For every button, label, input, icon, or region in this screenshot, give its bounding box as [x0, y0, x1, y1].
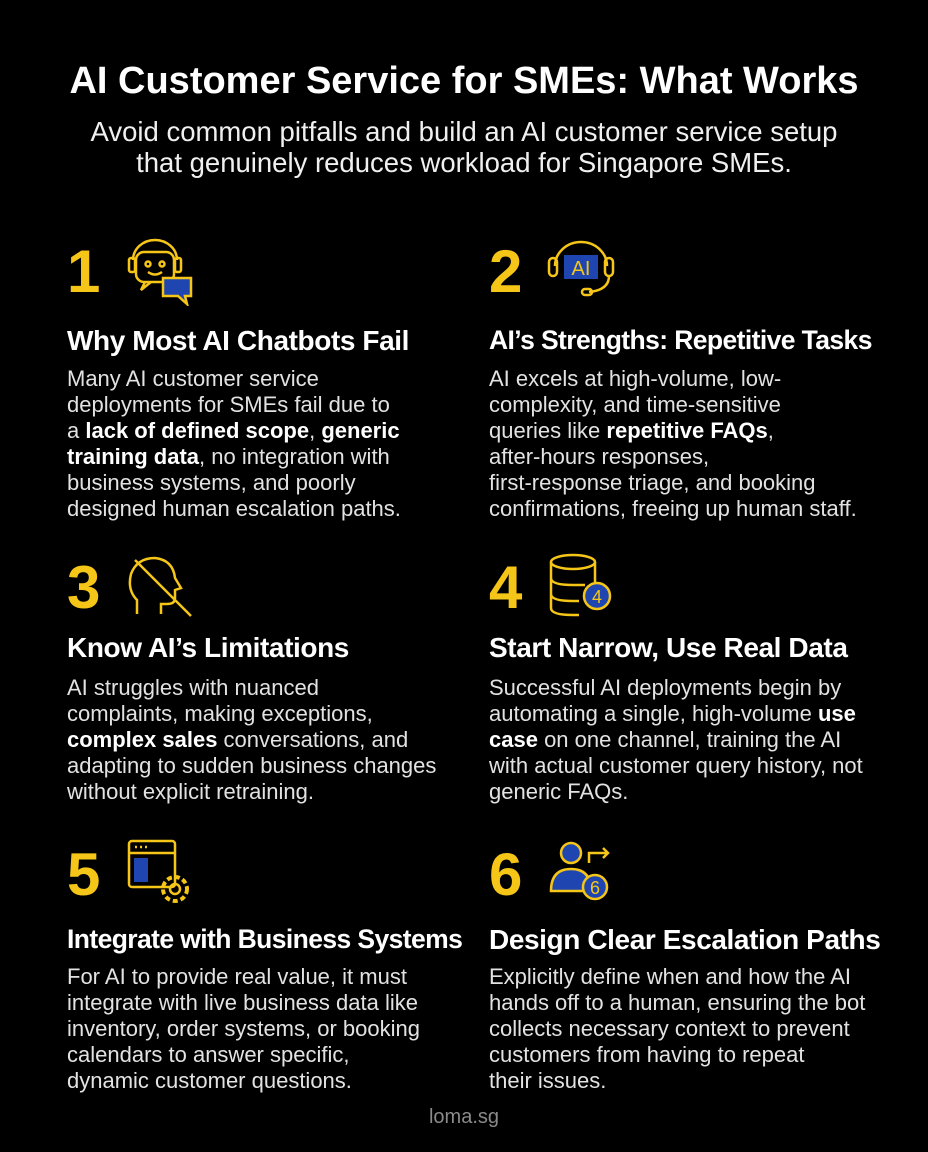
body text: confirmations, freeing up human staff. — [489, 496, 857, 521]
body text: Many AI customer service — [67, 366, 319, 391]
body text: complexity, and time-sensitive — [489, 392, 781, 417]
body text — [67, 964, 420, 1093]
body text: queries like repetitive FAQs, — [489, 418, 774, 443]
subtitle: Avoid common pitfalls and build an AI customer service setup — [91, 116, 837, 147]
body text — [67, 366, 401, 521]
body text: a lack of defined scope, generic — [67, 418, 400, 443]
panel: 3 limitations — [67, 554, 436, 804]
icon: chatbot — [128, 238, 192, 306]
number 6: 6 — [489, 841, 522, 908]
panel: 6 escalation — [489, 841, 880, 1093]
heading: Design Clear Escalation Paths — [489, 924, 880, 955]
icon: head crossed out — [128, 556, 192, 617]
body text: inventory, order systems, or booking — [67, 1016, 420, 1041]
body text: collects necessary context to prevent — [489, 1016, 850, 1041]
body text — [67, 675, 436, 804]
icon: database — [550, 554, 612, 616]
panel: 2 strengths — [489, 238, 872, 521]
body text: generic FAQs. — [489, 779, 628, 804]
footer: loma.sg — [429, 1106, 499, 1128]
body text: designed human escalation paths. — [67, 496, 401, 521]
body text: integrate with live business data like — [67, 990, 418, 1015]
icon: window with gear — [128, 840, 189, 903]
number 3: 3 — [67, 554, 100, 621]
heading: Integrate with Business Systems — [67, 924, 462, 954]
body text: deployments for SMEs fail due to — [67, 392, 390, 417]
number 5: 5 — [67, 841, 100, 908]
body text: dynamic customer questions. — [67, 1068, 352, 1093]
subtitle: that genuinely reduces workload for Singapore SMEs. — [136, 147, 792, 178]
body text: AI struggles with nuanced — [67, 675, 319, 700]
body text — [489, 366, 857, 521]
body text: adapting to sudden business changes — [67, 753, 436, 778]
body text: customers from having to repeat — [489, 1042, 804, 1067]
body text: complex sales conversations, and — [67, 727, 408, 752]
panel: 4 start narrow — [489, 554, 863, 804]
heading: Why Most AI Chatbots Fail — [67, 325, 409, 356]
icon: AI headset: AI — [572, 258, 590, 280]
body text: calendars to answer specific, — [67, 1042, 349, 1067]
body text: with actual customer query history, not — [489, 753, 863, 778]
body text: complaints, making exceptions, — [67, 701, 373, 726]
icon: AI headset — [548, 240, 614, 296]
body text: hands off to a human, ensuring the bot — [489, 990, 865, 1015]
body text: their issues. — [489, 1068, 606, 1093]
icon: person with arrow — [550, 842, 610, 900]
body text: business systems, and poorly — [67, 470, 356, 495]
heading: Start Narrow, Use Real Data — [489, 632, 848, 663]
panel: 5 integrate — [67, 840, 462, 1093]
heading: AI’s Strengths: Repetitive Tasks — [489, 325, 872, 355]
number 4: 4 — [489, 554, 522, 621]
body text: Explicitly define when and how the AI — [489, 964, 851, 989]
body text: For AI to provide real value, it must — [67, 964, 407, 989]
body text: Successful AI deployments begin by — [489, 675, 841, 700]
body text: training data, no integration with — [67, 444, 390, 469]
number 1: 1 — [67, 238, 100, 305]
number 2: 2 — [489, 238, 522, 305]
subtitle — [90, 116, 837, 178]
body text: first-response triage, and booking — [489, 470, 816, 495]
panel: 1 why chatbots fail — [67, 238, 409, 521]
body text — [489, 964, 866, 1093]
body text: automating a single, high-volume use — [489, 701, 856, 726]
body text: after-hours responses, — [489, 444, 709, 469]
heading: Know AI’s Limitations — [67, 632, 349, 663]
body text: case on one channel, training the AI — [489, 727, 841, 752]
body text: AI excels at high-volume, low- — [489, 366, 781, 391]
icon: person with arrow: 6 — [590, 878, 600, 898]
icon: database: 4 — [592, 587, 602, 607]
body text: without explicit retraining. — [67, 779, 314, 804]
body text — [489, 675, 863, 804]
title: AI Customer Service for SMEs: What Works — [69, 60, 859, 102]
